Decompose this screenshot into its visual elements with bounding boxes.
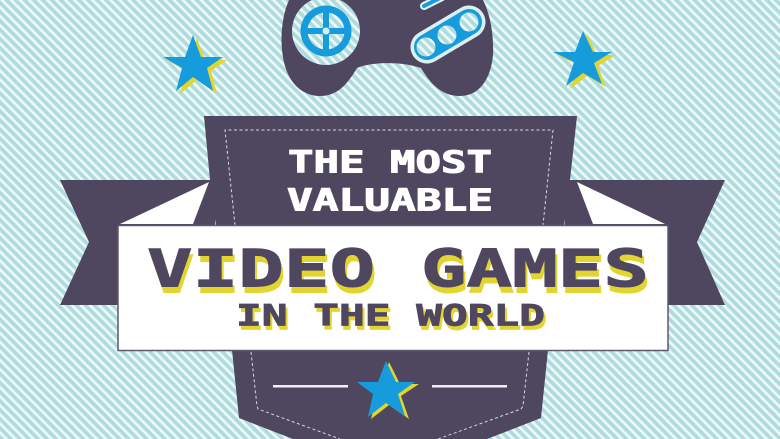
title panel — [118, 226, 668, 350]
shield panel — [204, 116, 577, 439]
icon: left star — [163, 35, 227, 94]
heading: the most valuable: VALUABLE — [287, 184, 493, 218]
icon: game controller — [282, 0, 493, 96]
title: video games: VIDEO GAMES — [147, 240, 649, 300]
title: video games — [147, 240, 651, 306]
stitched outline — [225, 130, 553, 439]
divider: left line — [273, 385, 348, 388]
subtitle: in the world: IN THE WORLD — [238, 302, 547, 336]
ribbon: left tail — [60, 180, 215, 305]
ribbon fold: right — [577, 182, 665, 224]
ribbon: right tail — [565, 180, 725, 305]
subtitle: in the world: IN THE WORLD — [236, 298, 545, 332]
divider: right line — [432, 385, 507, 388]
heading: the most valuable: THE MOST — [288, 146, 492, 180]
heading: the most valuable — [287, 146, 493, 218]
icon: right star — [553, 31, 616, 89]
title: video games: VIDEO GAMES — [149, 246, 651, 306]
icon: center star — [357, 361, 419, 419]
ribbon fold: left — [120, 182, 209, 224]
subtitle: in the world — [236, 298, 547, 336]
